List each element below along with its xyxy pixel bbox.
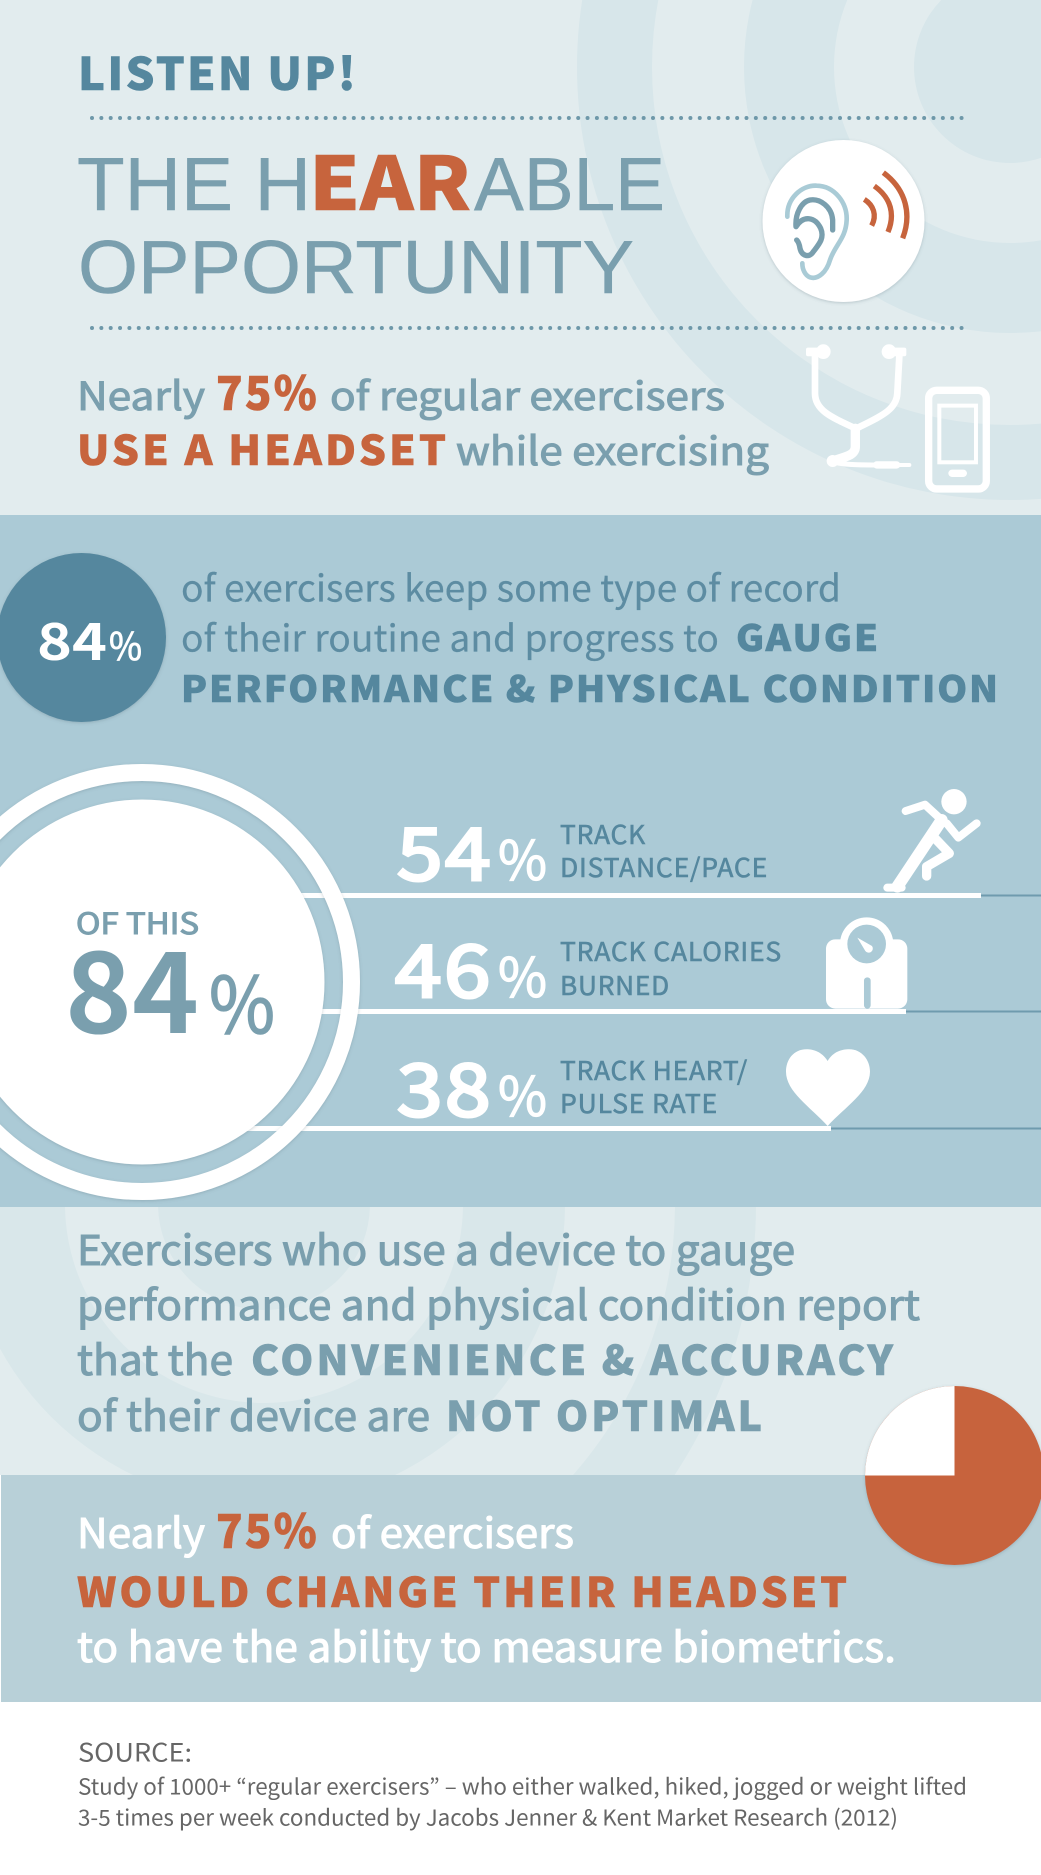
text: convenience and accuracy: that the: [77, 1327, 233, 1387]
text: record routine and progress: PERFORMANCE & PHYSICAL CONDITION: [181, 661, 1000, 713]
row: 46% track calories burned: BURNED: [560, 966, 670, 1003]
badge: 84%: %: [109, 616, 142, 671]
panel: device convenience background: [0, 1207, 1041, 1475]
text: record routine and progress: of their routine and progress to: [181, 608, 719, 662]
row: 54% track distance/pace: DISTANCE/PACE: [560, 848, 768, 885]
row: 38% track heart/pulse rate: [397, 1032, 748, 1137]
text: would change their headset: Nearly: [77, 1500, 205, 1560]
row: 38% track heart/pulse rate: 38: [397, 1032, 493, 1137]
stat text: 75% use a headset: USE A HEADSET: [77, 417, 449, 477]
title: OPPORTUNITY: [78, 225, 634, 309]
row: 54% track distance/pace: [397, 796, 768, 901]
row: 46% track calories burned: [395, 913, 782, 1018]
panel: header background: [0, 0, 1041, 515]
dotted divider top: [92, 116, 968, 120]
row: 54% track distance/pace: %: [498, 817, 547, 896]
text: convenience and accuracy: NOT OPTIMAL: [446, 1383, 765, 1443]
icon: earphones and phone: [806, 344, 986, 489]
row: 46% track calories burned: 46: [395, 913, 493, 1018]
source note: 3-5 times per week conducted by Jacobs Jenner & Kent Market Research (2012): [78, 1800, 898, 1832]
row: 46% track calories burned: TRACK CALORIES: [560, 932, 782, 969]
title: EAR: [309, 125, 471, 232]
ring and disc: of this 84%: %: [209, 944, 275, 1056]
text: convenience and accuracy: performance and physical condition report: [77, 1272, 920, 1332]
icon: heart: [786, 1049, 870, 1126]
row: 38% track heart/pulse rate: %: [498, 1053, 547, 1132]
text: would change their headset: WOULD CHANGE THEIR HEADSET: [77, 1559, 850, 1619]
stat text: 75% use a headset: of regular exercisers: [330, 366, 725, 422]
text: would change their headset: of exercisers: [331, 1500, 574, 1560]
stat text: 75% use a headset: 75%: [216, 355, 319, 424]
stat text: 75% use a headset: [77, 355, 769, 477]
text: record routine and progress: of exercisers keep some type of record: [181, 558, 841, 612]
title: ABLE: [474, 142, 665, 226]
icon: weighing scale: [826, 917, 907, 1009]
text: would change their headset: [77, 1493, 896, 1674]
text: would change their headset: to have the ability to measure biometrics.: [77, 1614, 896, 1674]
title: THE H: [77, 142, 311, 226]
ring and disc: of this 84%: [0, 772, 352, 1192]
text: record routine and progress: [181, 558, 1000, 713]
text: convenience and accuracy: [77, 1217, 920, 1443]
source note: SOURCE:: [78, 1734, 192, 1770]
badge: 84%: [0, 553, 166, 722]
stat text: 75% use a headset: Nearly: [77, 366, 205, 422]
panel: 84% tracking: [0, 515, 1041, 1208]
stat text: 75% use a headset: while exercising: [456, 421, 769, 477]
dotted divider bottom: [92, 326, 968, 330]
text: convenience and accuracy: of their device are: [77, 1383, 430, 1443]
pie chart: 75%: [865, 1386, 1041, 1565]
ring and disc: of this 84%: OF THIS: [76, 901, 199, 943]
title: [77, 125, 665, 309]
source note: [78, 1734, 967, 1832]
source note: Study of 1000+ “regular exercisers” – who either walked, hiked, jogged or weight lifted: [78, 1770, 967, 1802]
text: record routine and progress: GAUGE: [736, 610, 880, 662]
rule lines for tracking rows: [143, 893, 1041, 1131]
row: 54% track distance/pace: TRACK: [560, 815, 646, 852]
icon: ear in circle: [762, 140, 924, 302]
icon: runner: [887, 789, 977, 888]
badge: 84%: 84: [37, 601, 107, 675]
eyebrow heading: listen up: LISTEN UP!: [78, 38, 358, 103]
row: 46% track calories burned: %: [498, 934, 547, 1013]
ring and disc: of this 84%: 84: [65, 904, 199, 1066]
row: 38% track heart/pulse rate: PULSE RATE: [560, 1084, 718, 1121]
text: convenience and accuracy: CONVENIENCE & ACCURACY: [251, 1327, 896, 1387]
panel: would change headset: [1, 1475, 1041, 1702]
text: convenience and accuracy: Exercisers who use a device to gauge: [77, 1217, 795, 1277]
row: 38% track heart/pulse rate: TRACK HEART/: [560, 1051, 748, 1088]
text: would change their headset: 75%: [216, 1493, 319, 1562]
row: 54% track distance/pace: 54: [397, 796, 493, 901]
